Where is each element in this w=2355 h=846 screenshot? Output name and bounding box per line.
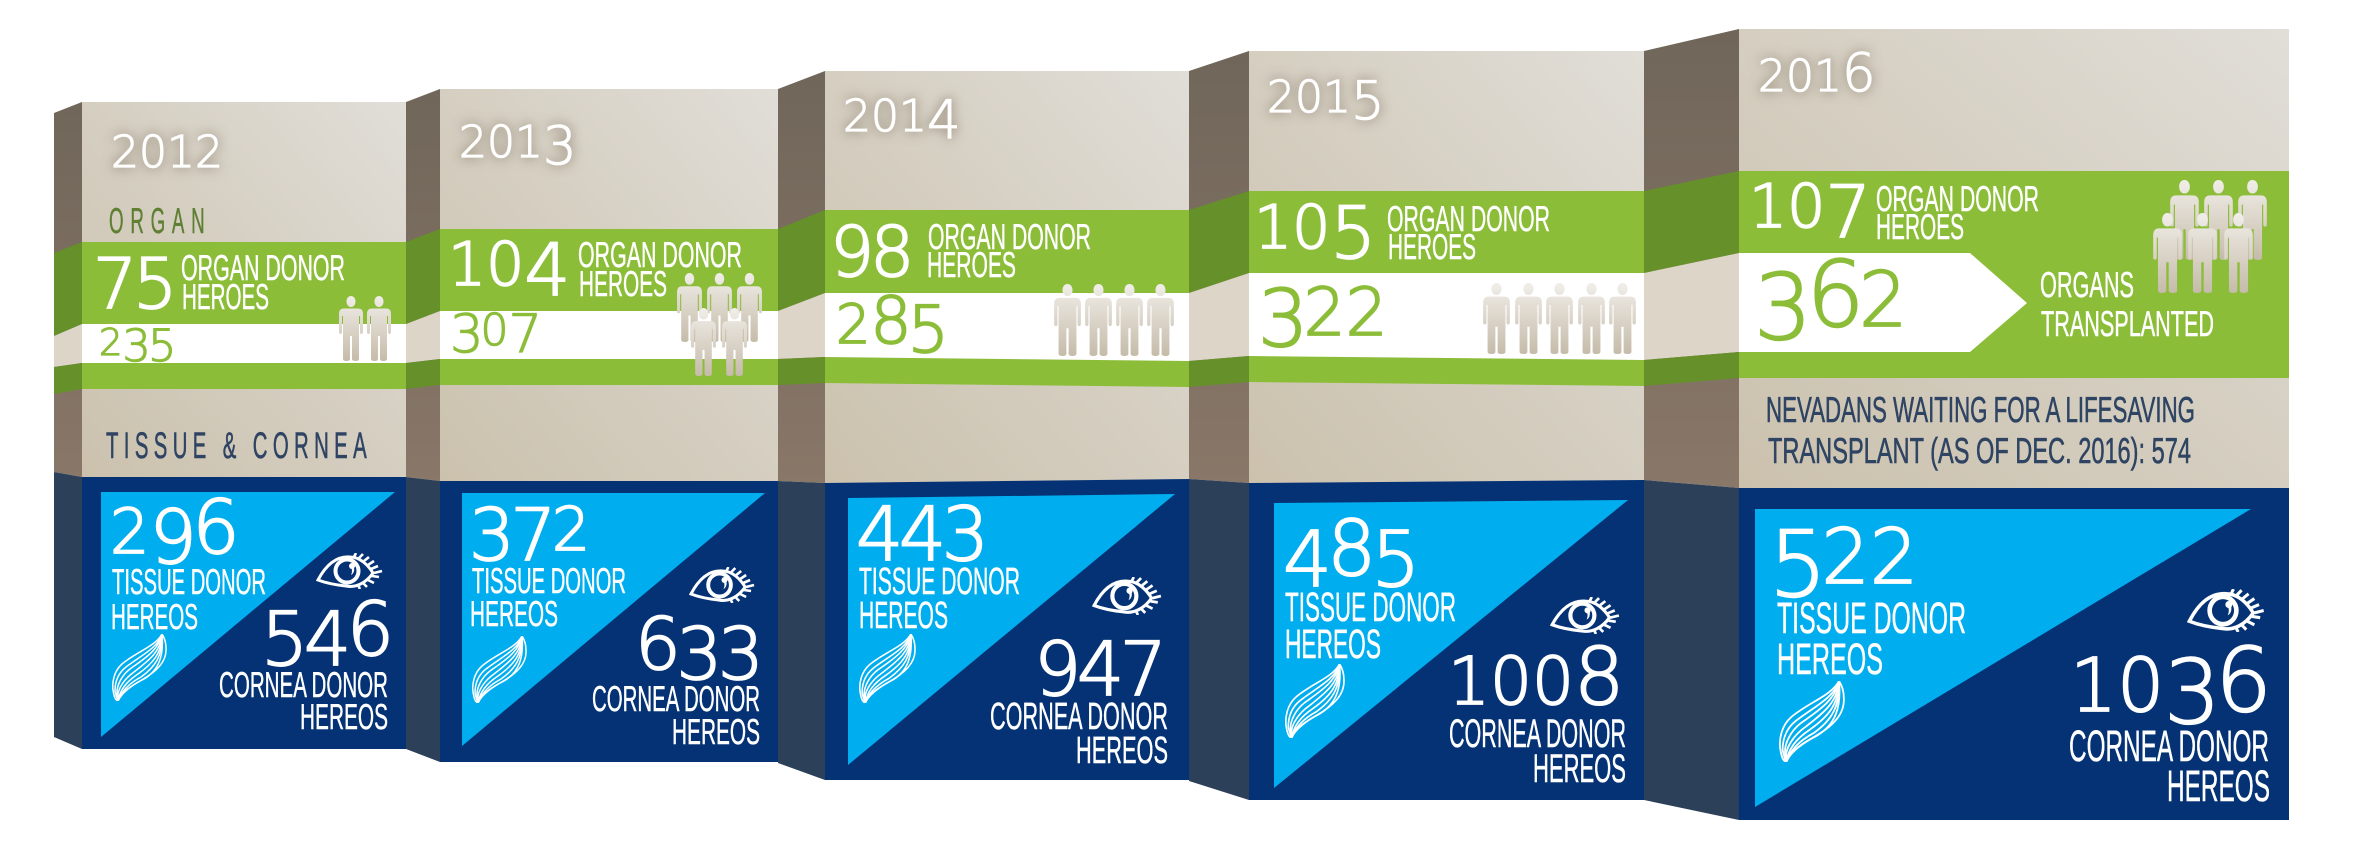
2016 side wall [1644,29,1739,820]
organ donor label [578,234,742,304]
organ donor label: HEROES [182,276,269,317]
2016 beige face [1739,29,2289,488]
organ donor label: HEROES [579,263,667,304]
number: 235 transplanted: 235 [99,321,174,372]
tissue label [1285,584,1456,667]
organ donor label [1876,178,2039,247]
tissue label: HEREOS [111,596,198,637]
tissue label: TISSUE DONOR [112,561,266,602]
icon: eye [2189,589,2264,632]
cornea label [219,664,388,737]
icon: tissue [473,636,526,703]
tissue label: HEREOS [1285,621,1381,667]
cornea label: CORNEA DONOR [1449,712,1626,756]
tissue label: HEREOS [470,593,558,634]
organ donor label: HEROES [1388,226,1476,267]
2014 organ band [825,210,1189,387]
icon: tissue [860,634,915,703]
icon: eye [318,553,382,589]
number: 1036 cornea: 1036 [2070,629,2267,744]
number: 1008 cornea: 1008 [1448,630,1620,723]
panel: 2012 [54,102,406,749]
2015 beige face [1249,51,1644,483]
2014 beige face [825,71,1189,483]
cornea label: CORNEA DONOR [592,678,760,719]
organ donor label: ORGAN DONOR [928,216,1091,257]
icon: tissue [113,634,166,701]
organ donor label [181,247,345,317]
number: 546 cornea: 546 [261,586,390,683]
cornea label [990,696,1168,772]
number: 372 tissue: 372 [469,493,590,577]
icon: tissue [1286,664,1344,738]
year 2014: 2014 [843,90,957,151]
tissue label: TISSUE DONOR [859,561,1020,603]
tissue label [111,561,266,637]
year 2015: 2015 [1267,71,1381,132]
number: 633 cornea: 633 [635,602,760,696]
organ donor label: ORGAN DONOR [578,234,742,275]
2012 navy panel [82,477,406,749]
number: 107 organ donors: 107 [1749,170,1867,254]
2015 navy panel [1249,480,1644,800]
panel: 2015 [1189,51,1644,800]
number: 362 transplanted: 362 [1754,241,1907,361]
organ donor label: ORGAN DONOR [1876,178,2039,219]
icon: people 4 [1054,284,1174,356]
cornea label: CORNEA DONOR [990,696,1168,738]
icon: people 6 [2153,180,2267,293]
organs transplanted label [2040,264,2214,344]
tissue label: HEREOS [859,595,948,637]
tissue label: TISSUE DONOR [1285,584,1456,630]
2013 side wall [406,89,440,762]
heading: tissue and cornea: TISSUE & CORNEA [106,425,367,466]
tissue label: TISSUE DONOR [1777,594,1966,643]
cornea label [1449,712,1626,791]
number: 443 tissue: 443 [856,491,985,578]
year 2016: 2016 [1758,43,1872,104]
2013 navy panel [440,481,778,762]
icon: people 2 [339,296,391,361]
2012 beige face [82,102,406,477]
2013 beige face [440,89,778,481]
icon: eye [691,567,754,603]
cornea label: HEREOS [1533,747,1626,791]
number: 307 transplanted: 307 [450,304,539,365]
icon: people 5 [1483,283,1636,354]
number: 522 tissue: 522 [1769,511,1918,618]
organ donor label: ORGAN DONOR [1387,198,1550,239]
2014 navy panel [825,479,1189,780]
organ donor label [1387,198,1550,267]
organ donor label: HEROES [927,244,1016,285]
number: 104 organ donors: 104 [448,228,566,312]
arrow: organs transplanted [1739,253,2027,352]
2013 organ band [440,229,778,385]
2015 side wall [1189,51,1249,800]
panel: 2013 [406,89,778,762]
number: 98 organ donors: 98 [830,212,910,293]
2016 navy panel [1739,488,2289,820]
2012 side wall [54,102,82,749]
number: 296 tissue: 296 [110,484,235,581]
tissue label [859,561,1020,637]
organ donor label: HEROES [1876,206,1964,247]
tissue label: TISSUE DONOR [472,560,626,601]
icon: eye [1552,597,1619,634]
heading: organ: ORGAN [109,200,205,241]
icon: eye [1094,577,1161,615]
cornea label [2069,722,2270,811]
number: 947 cornea: 947 [1034,626,1163,713]
tissue label [1777,594,1966,684]
cornea label: HEREOS [300,696,388,737]
number: 285 transplanted: 285 [836,284,945,368]
organ donor label: ORGAN DONOR [181,247,345,288]
tissue label [470,560,626,634]
waiting list text [1766,389,2195,471]
2014 side wall [778,71,825,780]
cornea label: CORNEA DONOR [219,664,388,705]
number: 75 organ donors: 75 [93,244,173,325]
2012 organ band [82,242,406,389]
cornea label: HEREOS [1076,730,1168,772]
number: 105 organ donors: 105 [1254,191,1372,275]
2015 organ band [1249,191,1644,386]
2016 organ band [1739,171,2289,378]
organs transplanted label: TRANSPLANTED [2041,303,2214,344]
organ donor label [927,216,1091,285]
panel: 2014 [778,71,1189,780]
organs transplanted label: ORGANS [2040,264,2134,305]
year 2013: 2013 [459,116,573,177]
tissue label: HEREOS [1777,635,1883,684]
cornea label [592,678,760,752]
icon: tissue [1780,681,1844,762]
cornea label: HEREOS [2167,762,2270,811]
number: 322 transplanted: 322 [1258,272,1388,365]
icon: people 5 [677,273,762,376]
number: 485 tissue: 485 [1283,505,1416,605]
year 2012: 2012 [111,127,223,178]
cornea label: HEREOS [672,711,760,752]
panel: 2016 [1644,29,2289,820]
